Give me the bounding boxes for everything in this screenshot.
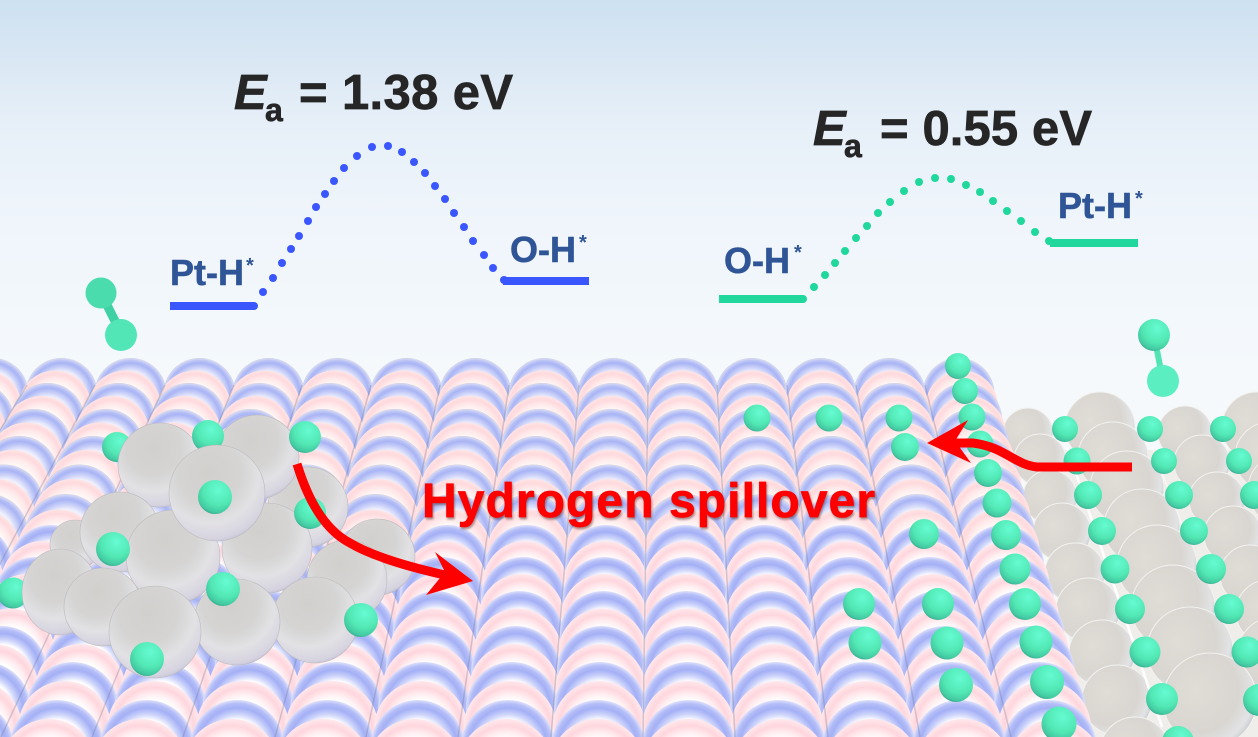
heading: activation energy 1.38 eV: [234, 66, 513, 128]
level: Pt-H left: *: [246, 255, 254, 277]
hydrogen atoms on support and substrate: [744, 353, 1258, 737]
label: hydrogen spillover: Hydrogen spillover: [422, 475, 875, 528]
energy diagram: Pt to oxide: [170, 66, 589, 310]
arrow: spillover from substrate: [927, 420, 1132, 467]
level: Pt-H right: Pt-H: [1058, 185, 1132, 226]
heading: activation energy 1.38 eV: a: [265, 92, 283, 128]
level: O-H left: *: [794, 242, 802, 264]
arrow: spillover from cluster: [297, 464, 473, 595]
platinum substrate at right: [1003, 392, 1258, 737]
H2 molecule left: [86, 278, 137, 351]
level: O-H right: [503, 229, 589, 285]
energy diagram: oxide to Pt: [719, 102, 1143, 303]
level: Pt-H left: Pt-H: [170, 252, 244, 293]
heading: activation energy 0.55 eV: [813, 102, 1092, 164]
heading: activation energy 1.38 eV: = 1.38 eV: [299, 66, 513, 120]
level: O-H left: O-H: [724, 240, 790, 281]
level: Pt-H left: [170, 252, 254, 310]
heading: activation energy 1.38 eV: E: [234, 66, 268, 120]
heading: activation energy 0.55 eV: = 0.55 eV: [880, 102, 1092, 156]
H2 molecule right: [1138, 319, 1179, 397]
level: Pt-H right: *: [1135, 188, 1143, 210]
level: Pt-H right: [1050, 185, 1143, 247]
oxide support surface: [0, 358, 1102, 737]
dotted barrier curve green: [799, 174, 1053, 303]
level: O-H left: [719, 240, 803, 303]
dotted barrier curve blue: [250, 142, 508, 310]
level: O-H right: O-H: [510, 229, 576, 270]
level: O-H right: *: [579, 232, 587, 254]
heading: activation energy 0.55 eV: a: [844, 128, 862, 164]
platinum nanocluster with adsorbed hydrogen: [0, 415, 415, 678]
heading: activation energy 0.55 eV: E: [813, 102, 847, 156]
